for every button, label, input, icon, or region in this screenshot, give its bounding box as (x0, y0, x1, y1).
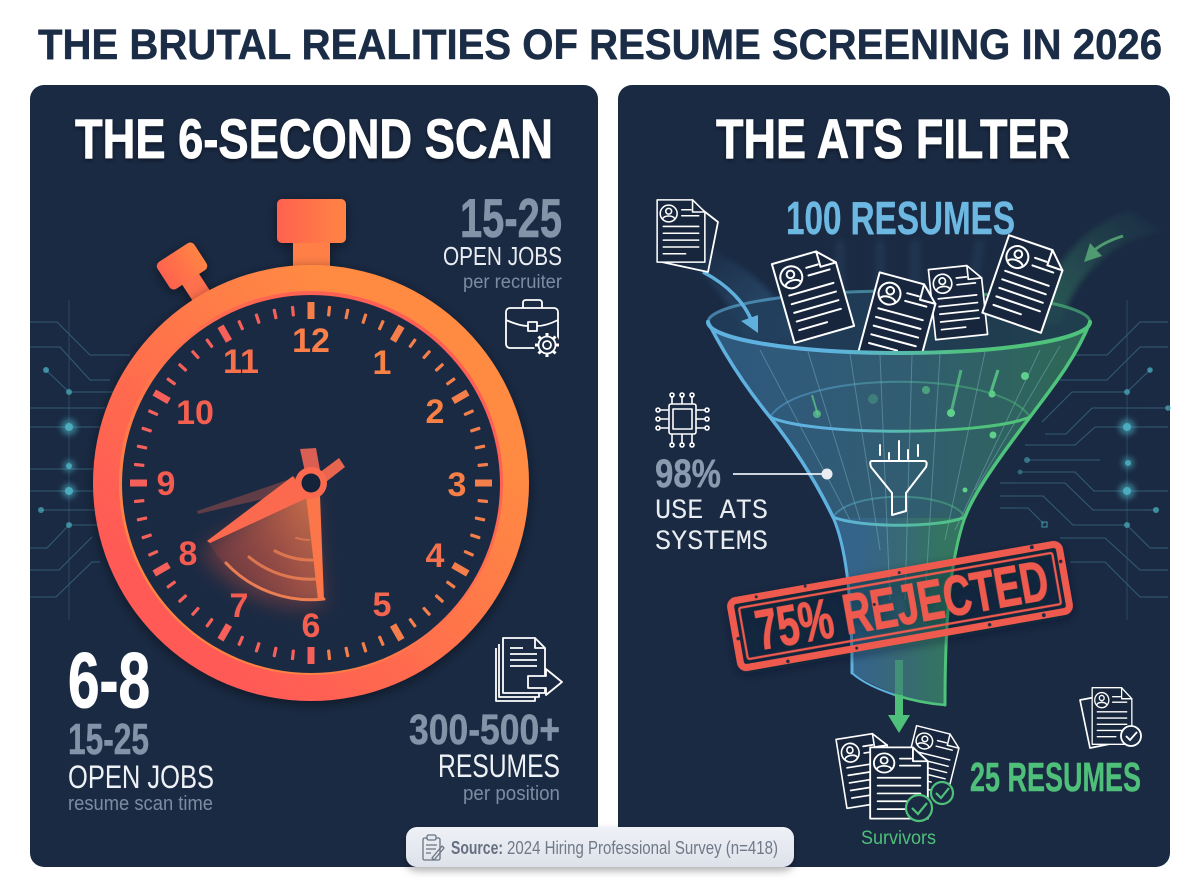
icon: document stack with arrow (496, 638, 562, 701)
stat: resumes per position: RESUMES (438, 748, 560, 784)
stat: 98% use ATS systems: USE ATS (655, 496, 768, 527)
icon: clipboard (423, 835, 444, 860)
funnel ring back arcs (770, 382, 1030, 517)
source pill (406, 827, 794, 867)
icon: microchip (656, 393, 709, 447)
circuit glow dots left (38, 367, 77, 528)
clock numerals: 11 (223, 343, 259, 381)
left panel background (30, 85, 598, 867)
right panel background (618, 85, 1170, 867)
arrow: green down (888, 660, 910, 733)
resume 1 (772, 247, 854, 343)
icon: surviving resumes (836, 726, 962, 821)
funnel mouth (708, 291, 1090, 353)
circuit background left (30, 300, 130, 620)
funnel light streaks (760, 346, 1060, 600)
clock hands (207, 448, 345, 600)
surviving resume left (836, 732, 896, 808)
clock numerals: 8 (179, 535, 197, 573)
clock numerals: 9 (157, 465, 175, 503)
stopwatch (93, 199, 529, 701)
stamp: 75% rejected (729, 540, 1072, 671)
panel: the ATS filter (618, 85, 1171, 867)
clock numerals: 6 (302, 607, 320, 645)
clock numerals: 12 (292, 322, 330, 360)
funnel outline (708, 322, 1090, 705)
minute ticks right (308, 302, 492, 660)
elapsed time glow (200, 483, 324, 607)
stat: 98% use ATS systems: SYSTEMS (655, 527, 768, 558)
stat: 6-8 second scan time: resume scan time (68, 793, 213, 815)
check badges (906, 782, 953, 821)
arrow: green incoming (1084, 236, 1123, 262)
stat: open jobs per recruiter: OPEN JOBS (443, 241, 562, 271)
circuit glow dots right (1018, 367, 1171, 528)
stat: 6-8 second scan time: OPEN JOBS (68, 759, 214, 795)
icon: approved resume (1080, 688, 1141, 748)
label: 100 resumes: 100 RESUMES (786, 192, 1015, 244)
stat: open jobs per recruiter: 15-25 (460, 187, 562, 249)
clock numerals: 3 (448, 466, 466, 504)
surviving resume front (870, 747, 928, 819)
callout line (733, 468, 832, 480)
source pill: 2024 Hiring Professional Survey (n=418) (507, 838, 778, 858)
elapsed time sector (208, 483, 324, 601)
stat: resumes per position (409, 706, 560, 805)
clock numerals: 10 (176, 394, 214, 432)
sector motion arcs (226, 538, 324, 600)
stat: 98% use ATS systems (655, 452, 768, 558)
panel heading: THE ATS FILTER (716, 107, 1070, 170)
resume 3 (928, 264, 988, 340)
ghost hand (197, 477, 302, 514)
swoosh: incoming flows (695, 210, 1165, 340)
outer ring (93, 265, 529, 701)
stat: open jobs per recruiter (443, 187, 563, 293)
panel heading: THE 6-SECOND SCAN (75, 107, 553, 170)
circuit background right (1000, 300, 1168, 620)
icon: resume top left (657, 200, 718, 272)
funnel body upper (710, 292, 1088, 518)
clock face (119, 291, 503, 675)
stat: open jobs per recruiter: per recruiter (463, 272, 563, 293)
stat: resumes per position: 300-500+ (409, 706, 560, 754)
resume 2 (858, 271, 936, 351)
minute ticks left (130, 306, 314, 664)
resumes dropping into funnel (770, 234, 1064, 351)
surviving resume right (902, 726, 962, 794)
stat: 6-8 second scan time: 15-25 (68, 715, 149, 764)
funnel sparks (812, 370, 1029, 492)
clock numerals: 2 (426, 393, 444, 431)
stat: 98% use ATS systems: 98% (655, 452, 721, 496)
source text: Source: (451, 838, 503, 858)
clock numerals: 5 (373, 586, 391, 624)
resume 4 (982, 235, 1068, 333)
clock numerals: 7 (230, 587, 248, 625)
clock numerals: 4 (426, 537, 445, 575)
stat: 6-8 second scan time: 6-8 (68, 636, 150, 724)
funnel rim back (708, 291, 1090, 322)
clock numerals (157, 322, 466, 645)
stamp: 75% rejected: 75% REJECTED (751, 548, 1053, 663)
stat: 6-8 second scan time (68, 636, 214, 815)
funnel body stem (836, 518, 962, 704)
label: survivors: Survivors (861, 828, 936, 849)
icon: filter (870, 441, 927, 515)
funnel (708, 235, 1090, 705)
top button (277, 199, 346, 272)
arrow: blue incoming (703, 272, 758, 333)
panel: the 6-second scan (30, 85, 598, 867)
side button (155, 241, 218, 313)
icon: briefcase with gear (506, 300, 560, 358)
stat: resumes per position: per position (463, 783, 560, 805)
clock numerals: 1 (373, 344, 391, 382)
